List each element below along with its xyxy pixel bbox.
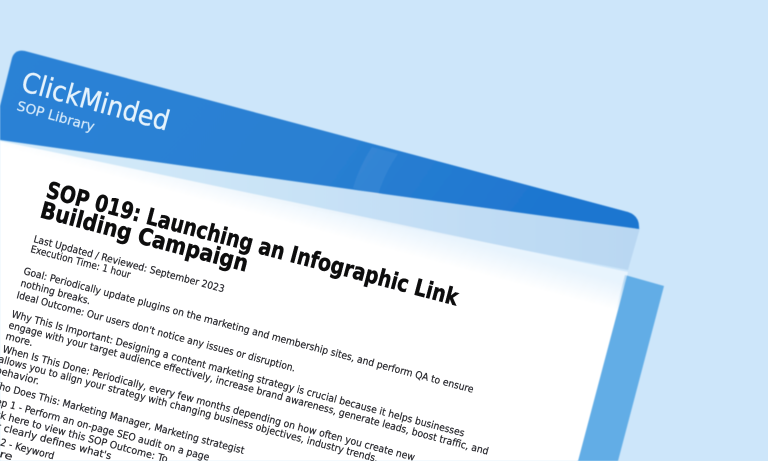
panel: blue header: [0, 51, 639, 229]
panel: document page: [0, 141, 628, 461]
document title: [37, 178, 462, 312]
document body text: [0, 234, 490, 461]
brand logo text: ClickMinded: [18, 65, 173, 137]
light header band: [0, 135, 640, 270]
document title: Building Campaign: [37, 198, 251, 277]
document body text: Execution Time: 1 hour: [29, 244, 132, 281]
document body text: nothing breaks.: [19, 278, 92, 307]
back sheet: [577, 275, 664, 461]
document body text: Goal: Periodically update plugins on the marketing and membership sites, and perform QA to ensure: [22, 266, 475, 396]
header highlight: [353, 147, 398, 195]
document body text: more.: [4, 331, 34, 349]
document body text: Ideal Outcome: Our users don't notice any issues or disruption.: [15, 290, 296, 374]
document title: SOP 019: Launching an Infographic Link: [43, 178, 462, 312]
brand subtitle: SOP Library: [15, 99, 96, 135]
document body text: Last Updated / Reviewed: September 2023: [32, 234, 226, 295]
document body text: Why This Is Important: Designing a content marketing strategy is crucial because it helps businesses: [10, 309, 466, 439]
